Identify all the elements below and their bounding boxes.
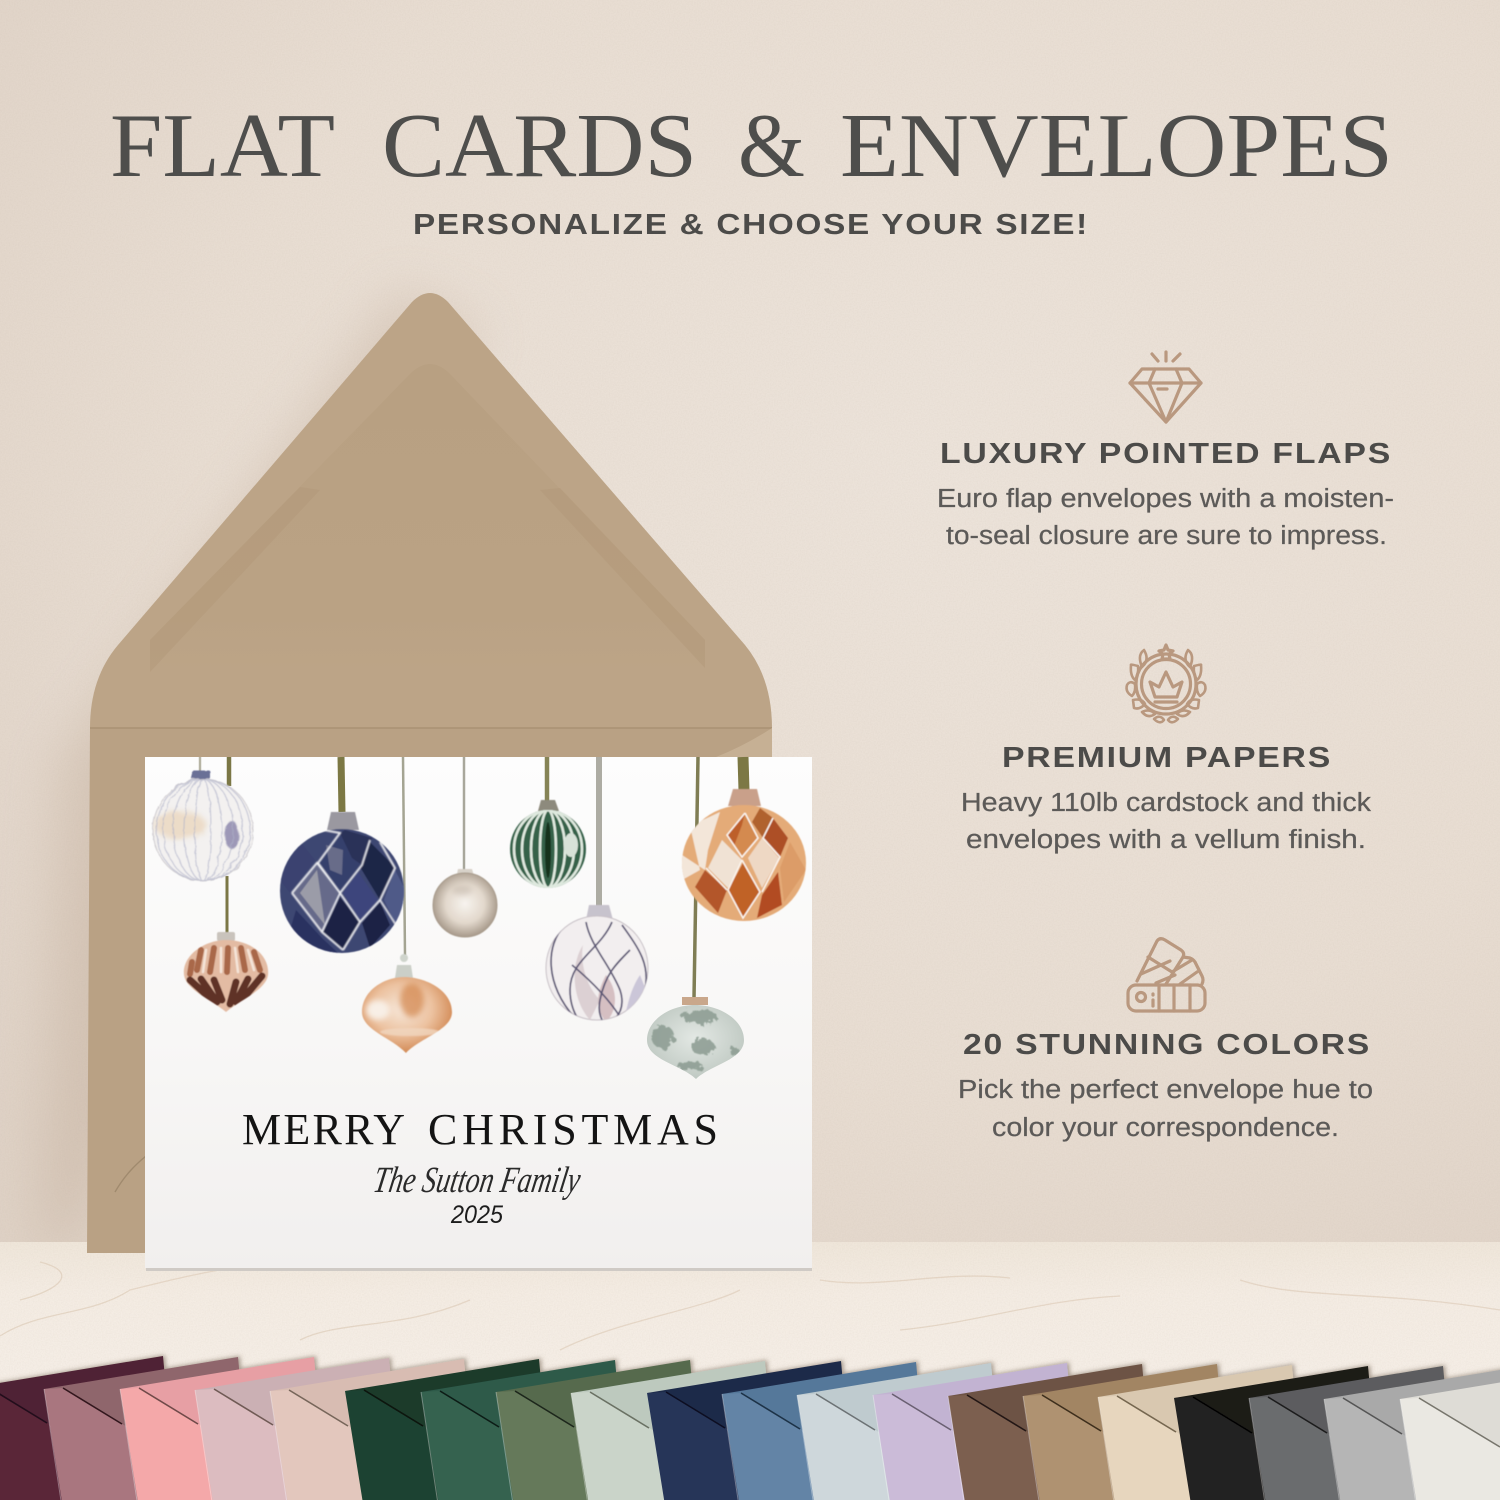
swatch: black (1174, 1366, 1370, 1500)
title: CARDS (382, 95, 697, 196)
background: marble ledge (0, 1242, 1500, 1500)
heading: 20 STUNNING COLORS (963, 1029, 1371, 1061)
ornament: sage speckled onion (647, 997, 744, 1079)
swatch: moss (496, 1360, 692, 1500)
envelope side seam (115, 1156, 146, 1192)
ornament: green striped ball (510, 800, 586, 888)
description: Heavy 110lb cardstock and thick (961, 789, 1371, 817)
swatch: shell (270, 1359, 466, 1500)
panel: 20 stunning colors: color your correspondence. (992, 1114, 1339, 1142)
panel: luxury pointed flaps (937, 352, 1394, 550)
card year: 2025 (450, 1201, 503, 1229)
subtitle: PERSONALIZE & CHOOSE YOUR SIZE! (413, 209, 1089, 241)
ornament: pearl ball (433, 869, 497, 937)
title: FLAT (110, 95, 335, 196)
swatch: lavender (873, 1363, 1069, 1500)
swatch: forest green (345, 1359, 541, 1500)
swatch row: 20 envelope colors (0, 1356, 1500, 1500)
swatch: mocha (948, 1364, 1144, 1500)
swatch: coral pink (120, 1357, 316, 1500)
swatch: cream (1098, 1365, 1294, 1500)
swatch: ivory (1400, 1367, 1500, 1500)
swatch: blush (195, 1358, 391, 1500)
swatch: ice grey (797, 1363, 993, 1500)
swatch: charcoal (1249, 1366, 1445, 1500)
envelope liner (150, 364, 705, 672)
panel: luxury pointed flaps: to-seal closure are sure to impress. (946, 522, 1387, 550)
description: Pick the perfect envelope hue to (958, 1076, 1373, 1104)
title: & (738, 95, 805, 196)
card greeting: CHRISTMAS (428, 1105, 718, 1154)
card family name: The Sutton Family (370, 1160, 584, 1201)
swatch: navy (647, 1361, 843, 1500)
swatch: kraft tan (1023, 1364, 1219, 1500)
ornament: orange harlequin ball (682, 789, 806, 921)
ornament: white ribbed ball (153, 770, 253, 881)
panel: 20 stunning colors (958, 939, 1373, 1142)
envelope (87, 293, 812, 1253)
description: Euro flap envelopes with a moisten- (937, 485, 1394, 513)
swatch: burgundy (0, 1356, 165, 1500)
swatch: mauve (44, 1357, 240, 1500)
card face (145, 757, 812, 1268)
ornament strings (200, 757, 744, 998)
icon: diamond (1130, 352, 1201, 422)
heading: LUXURY POINTED FLAPS (940, 438, 1392, 470)
swatch: denim blue (722, 1362, 918, 1500)
icon: colour fan deck (1128, 939, 1205, 1011)
ornament: peach onion (362, 954, 452, 1053)
card (145, 757, 812, 1271)
swatch: pale sage (571, 1361, 767, 1500)
envelope body (87, 728, 812, 1253)
heading: PREMIUM PAPERS (1002, 742, 1332, 774)
ornament: navy harlequin ball (280, 812, 408, 953)
ornament: lilac lattice ball (546, 905, 648, 1022)
icon: crown seal (1127, 645, 1205, 722)
card greeting: MERRY (242, 1105, 405, 1154)
title: ENVELOPES (840, 95, 1393, 196)
swatch: teal green (421, 1360, 617, 1500)
title (110, 95, 1393, 196)
envelope shadow on wall (40, 290, 480, 1250)
panel: premium papers (961, 645, 1371, 854)
envelope flap (90, 293, 772, 728)
ornament: copper onion (184, 932, 268, 1012)
swatch: silver (1324, 1367, 1500, 1500)
card greeting (242, 1105, 718, 1154)
panel: premium papers: envelopes with a vellum finish. (966, 826, 1366, 854)
